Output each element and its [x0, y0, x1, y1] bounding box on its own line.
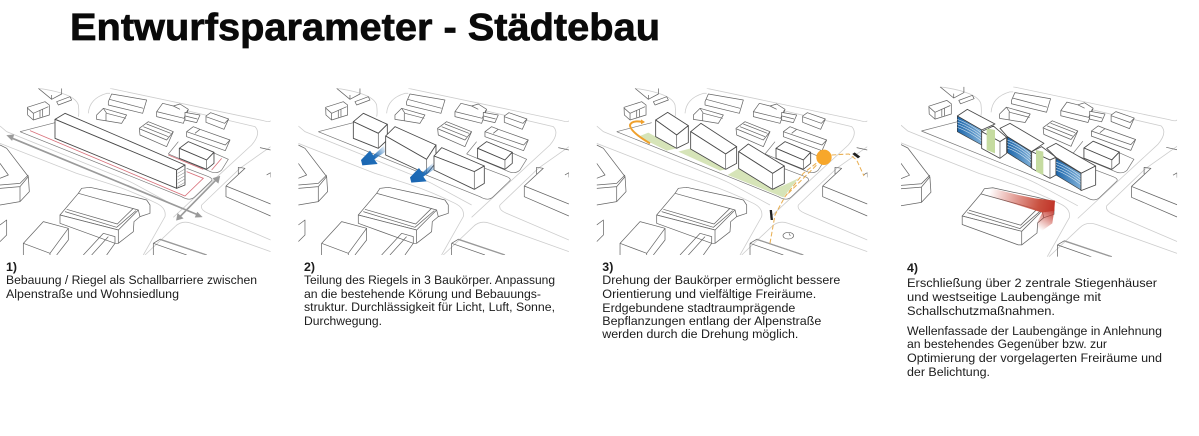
panel 2: three buildings: [298, 88, 569, 328]
caption 4: der Belichtung.: [907, 365, 990, 379]
three building volumes and blue arrows: [353, 113, 484, 189]
caption 1: Bebauung / Riegel als Schallbarriere zwischen: [6, 273, 257, 287]
dashed orange route: [770, 154, 864, 243]
caption 2: an die bestehende Körung und Bebauungs-: [304, 287, 541, 301]
small route labels: [770, 210, 773, 220]
caption 2: [304, 260, 555, 328]
caption 4: Wellenfassade der Laubengänge in Anlehnung: [907, 324, 1162, 338]
caption 4: Schallschutzmaßnahmen.: [907, 304, 1055, 318]
site context drawing 4: [901, 87, 1177, 257]
orange node: [816, 150, 832, 165]
arrow: blue right: [410, 163, 434, 183]
panel 3: rotated buildings: [597, 88, 867, 341]
caption 3: Erdgebundene stadtraumprägende: [602, 301, 795, 315]
panel 4: access and wave facade: [901, 87, 1177, 379]
arrow: along street: [7, 135, 220, 220]
single long building with red plot line and arrows: [7, 113, 222, 220]
caption 1: 1): [6, 260, 17, 274]
caption 2: 2): [304, 260, 315, 274]
caption 3: Drehung der Baukörper ermöglicht bessere: [602, 273, 840, 287]
site context drawing 3: [597, 88, 867, 255]
caption 1: [6, 260, 257, 301]
caption 3: 3): [602, 260, 613, 274]
arrow: blue left: [361, 145, 385, 165]
panel 1: noise barrier: [0, 88, 271, 301]
caption 2: struktur. Durchlässigkeit für Licht, Luft, Sonne,: [304, 300, 555, 314]
caption 3: Bepflanzungen entlang der Alpenstraße: [602, 314, 821, 328]
caption 3: Orientierung und vielfältige Freiräume.: [602, 287, 816, 301]
caption 4: an bestehendes Gegenüber bzw. zur: [907, 337, 1107, 351]
title: Entwurfsparameter - Städtebau: [70, 7, 660, 49]
caption 4: und westseitige Laubengänge mit: [907, 290, 1102, 304]
caption 3: werden durch die Drehung möglich.: [601, 327, 798, 341]
caption 4: Optimierung der vorgelagerten Freiräume und: [907, 351, 1162, 365]
caption 1: Alpenstraße und Wohnsiedlung: [6, 287, 179, 301]
roundabout mark: [783, 232, 794, 239]
caption 4: 4): [907, 261, 918, 275]
connected building with blue facades: [957, 109, 1096, 191]
caption 3: [601, 260, 840, 341]
site context drawing 1: [0, 88, 271, 255]
rotated volumes, green areas and orange path: [630, 112, 864, 243]
caption 2: Durchwegung.: [304, 314, 382, 328]
red wave facade highlight: [982, 187, 1055, 233]
arrow: orange curve: [630, 121, 650, 143]
caption 4: [907, 261, 1162, 379]
caption 4: Erschließung über 2 zentrale Stiegenhäuser: [907, 276, 1157, 290]
site context drawing 2: [298, 88, 569, 255]
caption 2: Teilung des Riegels in 3 Baukörper. Anpassung: [304, 273, 555, 287]
